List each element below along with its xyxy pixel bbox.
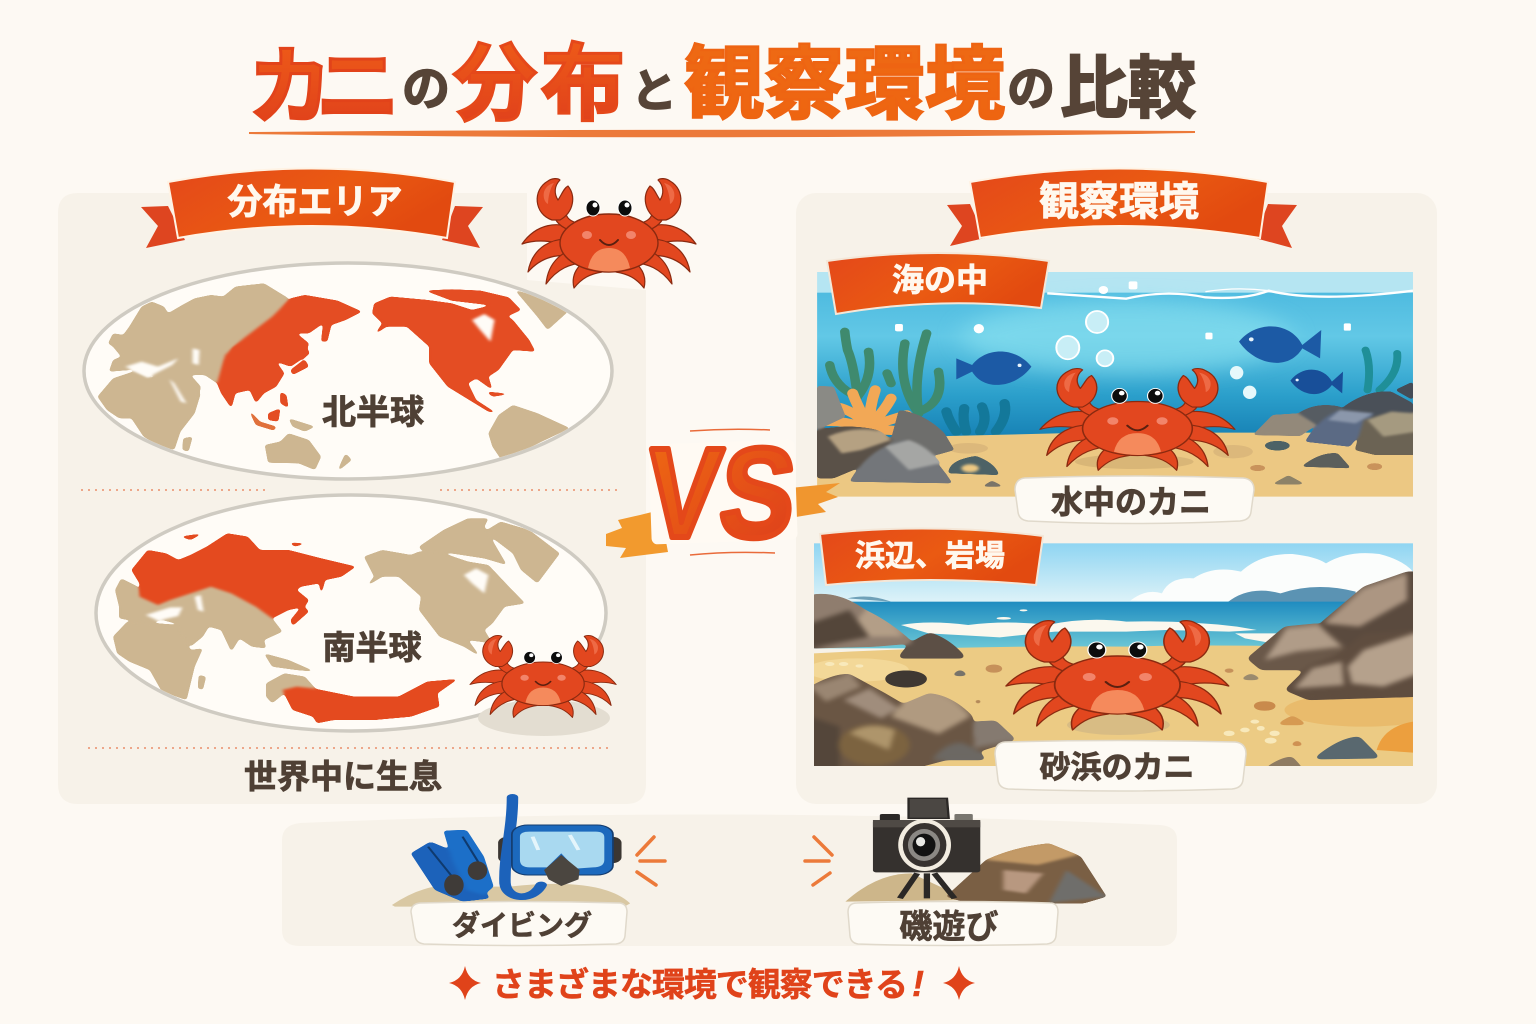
- coral: [822, 390, 907, 432]
- seas in tan land: [125, 348, 200, 403]
- panel: observation environment: [796, 168, 1443, 804]
- text: 世界中に生息: 世界中に生息: [244, 758, 442, 795]
- seaweed: [830, 332, 940, 413]
- tripod: [900, 873, 954, 898]
- clouds: [1130, 553, 1413, 602]
- snorkel: [505, 797, 541, 897]
- brush: right: [790, 483, 840, 518]
- banner: 分布エリア: 分布エリア: [227, 183, 403, 222]
- sea: [814, 602, 1346, 648]
- panel: activities band: [282, 797, 1177, 946]
- icon: sparkle lines left: [637, 837, 665, 885]
- label: 砂浜のカニ: 砂浜のカニ: [1040, 750, 1194, 785]
- VS badge: VS: [641, 422, 801, 565]
- title: カニ: [248, 40, 400, 134]
- fish: [956, 351, 1031, 385]
- banner: 浜辺、岩場: 浜辺、岩場: [855, 540, 1005, 573]
- icon: crab on map: [470, 635, 616, 718]
- callout: bottom tagline: さまざまな環境で観察できる: [492, 966, 908, 1003]
- map: southern hemisphere: [96, 495, 606, 731]
- mask straps: [498, 837, 622, 863]
- banner: 海の中: 海の中: [892, 262, 988, 298]
- label: 磯遊び: 磯遊び: [900, 908, 998, 945]
- title: 比較: [1060, 51, 1196, 127]
- title: と: [631, 65, 677, 117]
- fins: [411, 830, 494, 902]
- rocks: [810, 572, 1419, 770]
- label: 水中のカニ: [1015, 476, 1254, 524]
- label: 砂浜のカニ: [995, 740, 1246, 791]
- title: の: [1007, 63, 1055, 116]
- water surface: [1047, 291, 1413, 299]
- callout: bottom tagline: !: [912, 963, 924, 1004]
- banner: 海の中: [827, 253, 1049, 314]
- label: ダイビング: ダイビング: [452, 909, 592, 941]
- scene: beach: [806, 543, 1443, 770]
- sand: [814, 646, 1413, 766]
- icon: crab underwater: [1040, 369, 1235, 470]
- map: northern hemisphere: [84, 263, 612, 479]
- label: 北半球: 北半球: [322, 394, 424, 432]
- banner: 浜辺、岩場: [820, 528, 1043, 585]
- title: 観察環境: [684, 40, 1005, 129]
- panel: distribution area: [58, 168, 646, 804]
- label: 南半球: 南半球: [322, 629, 422, 666]
- banner: 分布エリア: [141, 168, 483, 248]
- sand: [817, 433, 1413, 497]
- pale pebbles: [825, 662, 1280, 744]
- title: 分布: [453, 37, 625, 131]
- banner: 観察環境: 観察環境: [1039, 180, 1199, 224]
- label: ダイビング: [411, 902, 627, 946]
- dotted divider: [81, 490, 617, 748]
- mask: [512, 825, 613, 875]
- icon: crab top: [522, 179, 696, 288]
- viewfinder: [909, 798, 949, 818]
- bubbles: [1056, 311, 1113, 366]
- continents tan: [98, 283, 570, 472]
- icon: crab on map shadow: [478, 700, 610, 736]
- icon: crab on beach: [1006, 621, 1229, 730]
- scene: underwater: [817, 272, 1417, 497]
- icon: sparkle lines right: [805, 837, 832, 885]
- icon: star right: [943, 966, 975, 1000]
- rocks: [817, 382, 1417, 487]
- label: 水中のカニ: 水中のカニ: [1051, 484, 1211, 520]
- banner: 観察環境: [947, 168, 1297, 248]
- icon: star left: [449, 966, 481, 1000]
- highlighted land red: [217, 289, 535, 422]
- hills: [1227, 587, 1356, 603]
- icon: camera and rock: [845, 798, 1107, 903]
- icon: diving gear: [392, 797, 630, 907]
- brush: left: [606, 510, 668, 558]
- label: 磯遊び: [848, 902, 1058, 946]
- body: [873, 820, 980, 872]
- title: の: [402, 63, 450, 116]
- title: [248, 37, 1196, 136]
